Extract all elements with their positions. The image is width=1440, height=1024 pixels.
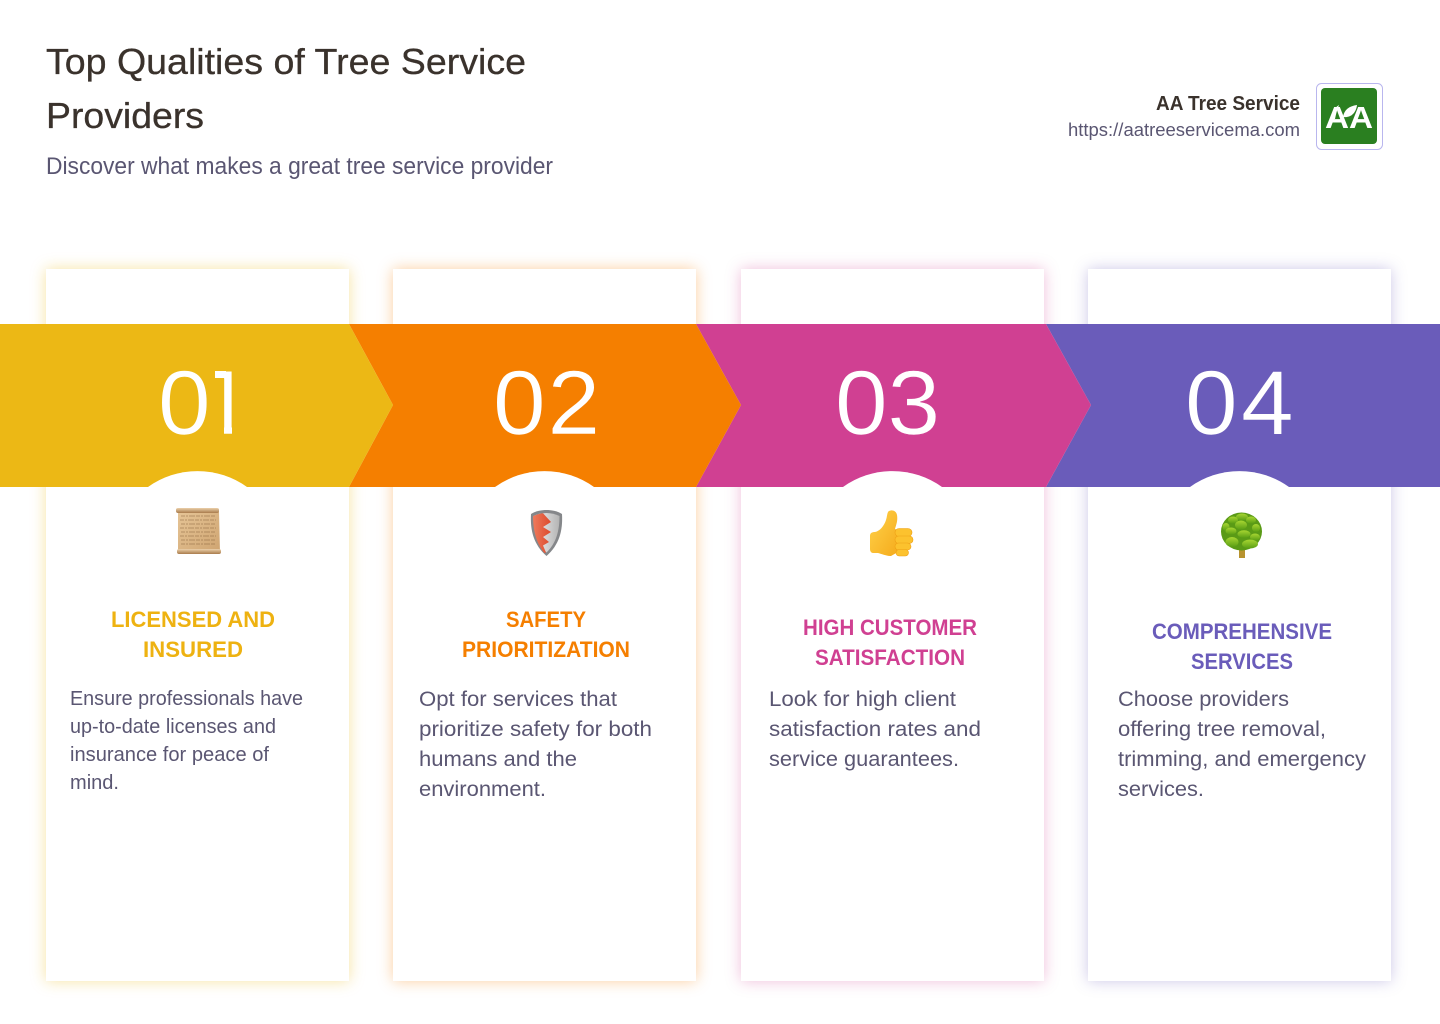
card 1 heading: INSURED <box>143 637 243 662</box>
card 1 text: Ensure professionals have <box>70 688 303 710</box>
card 4 text: Choose providers <box>1118 688 1289 711</box>
card 4 text <box>1118 688 1367 801</box>
number 03: 03 <box>835 352 940 454</box>
card 2 text <box>419 688 652 801</box>
arch: card 1 <box>148 471 247 487</box>
card 4 heading: SERVICES <box>1191 649 1293 674</box>
number 02: 02 <box>493 352 600 454</box>
card 3 text: satisfaction rates and <box>769 718 981 741</box>
brand text: https://aatreeservicema.com <box>1068 120 1300 140</box>
arrow 01 <box>0 324 393 487</box>
arrow 02 <box>349 324 741 487</box>
card 4 heading <box>1152 619 1332 674</box>
icon: scroll <box>176 508 221 554</box>
arch: card 2 <box>495 471 594 487</box>
number 04: 04 <box>1185 352 1294 454</box>
card 4 text: offering tree removal, <box>1118 718 1326 741</box>
card 3 text: service guarantees. <box>769 748 959 771</box>
title: Top Qualities of Tree Service <box>46 41 526 82</box>
card: high customer satisfaction <box>741 269 1044 981</box>
card 1 heading <box>111 607 275 662</box>
card 2 heading: PRIORITIZATION <box>462 637 630 662</box>
brand text: AA Tree Service <box>1156 93 1300 115</box>
number 01 <box>162 370 232 435</box>
card: licensed and insured <box>46 269 349 981</box>
card 2 text: Opt for services that <box>419 688 617 711</box>
card 3 heading: HIGH CUSTOMER <box>803 615 977 640</box>
card 2 text: environment. <box>419 778 546 801</box>
card 2 heading: SAFETY <box>506 607 586 632</box>
icon: tree <box>1221 512 1262 558</box>
card 3 text <box>769 688 981 771</box>
logo <box>1316 84 1382 150</box>
icon: shield <box>531 510 562 556</box>
card 1 text <box>70 688 303 794</box>
card 4 text: services. <box>1118 778 1204 801</box>
card 3 heading <box>803 615 977 670</box>
card 4 heading: COMPREHENSIVE <box>1152 619 1332 644</box>
number 01: 1 <box>201 353 252 454</box>
card 2 text: prioritize safety for both <box>419 718 652 741</box>
subtitle: Discover what makes a great tree service provider <box>46 153 553 180</box>
arrow 04 <box>1046 324 1440 487</box>
arch: card 3 <box>843 471 942 487</box>
logo: AA <box>1325 100 1373 135</box>
card 1 text: mind. <box>70 772 119 794</box>
title: Providers <box>46 95 204 136</box>
brand text <box>1068 93 1300 140</box>
card: safety prioritization <box>393 269 696 981</box>
card 2 text: humans and the <box>419 748 577 771</box>
arrow 03 <box>696 324 1091 487</box>
card 3 text: Look for high client <box>769 688 956 711</box>
title <box>46 41 526 136</box>
card: comprehensive services <box>1088 269 1391 981</box>
card 1 text: up-to-date licenses and <box>70 716 276 738</box>
icon: thumbs up <box>870 510 913 556</box>
arch: card 4 <box>1190 471 1289 487</box>
card 3 heading: SATISFACTION <box>815 645 965 670</box>
card 2 heading <box>462 607 630 662</box>
number 01: 0 <box>158 352 211 454</box>
card 1 text: insurance for peace of <box>70 744 269 766</box>
card 1 heading: LICENSED AND <box>111 607 275 632</box>
card 4 text: trimming, and emergency <box>1118 748 1367 771</box>
